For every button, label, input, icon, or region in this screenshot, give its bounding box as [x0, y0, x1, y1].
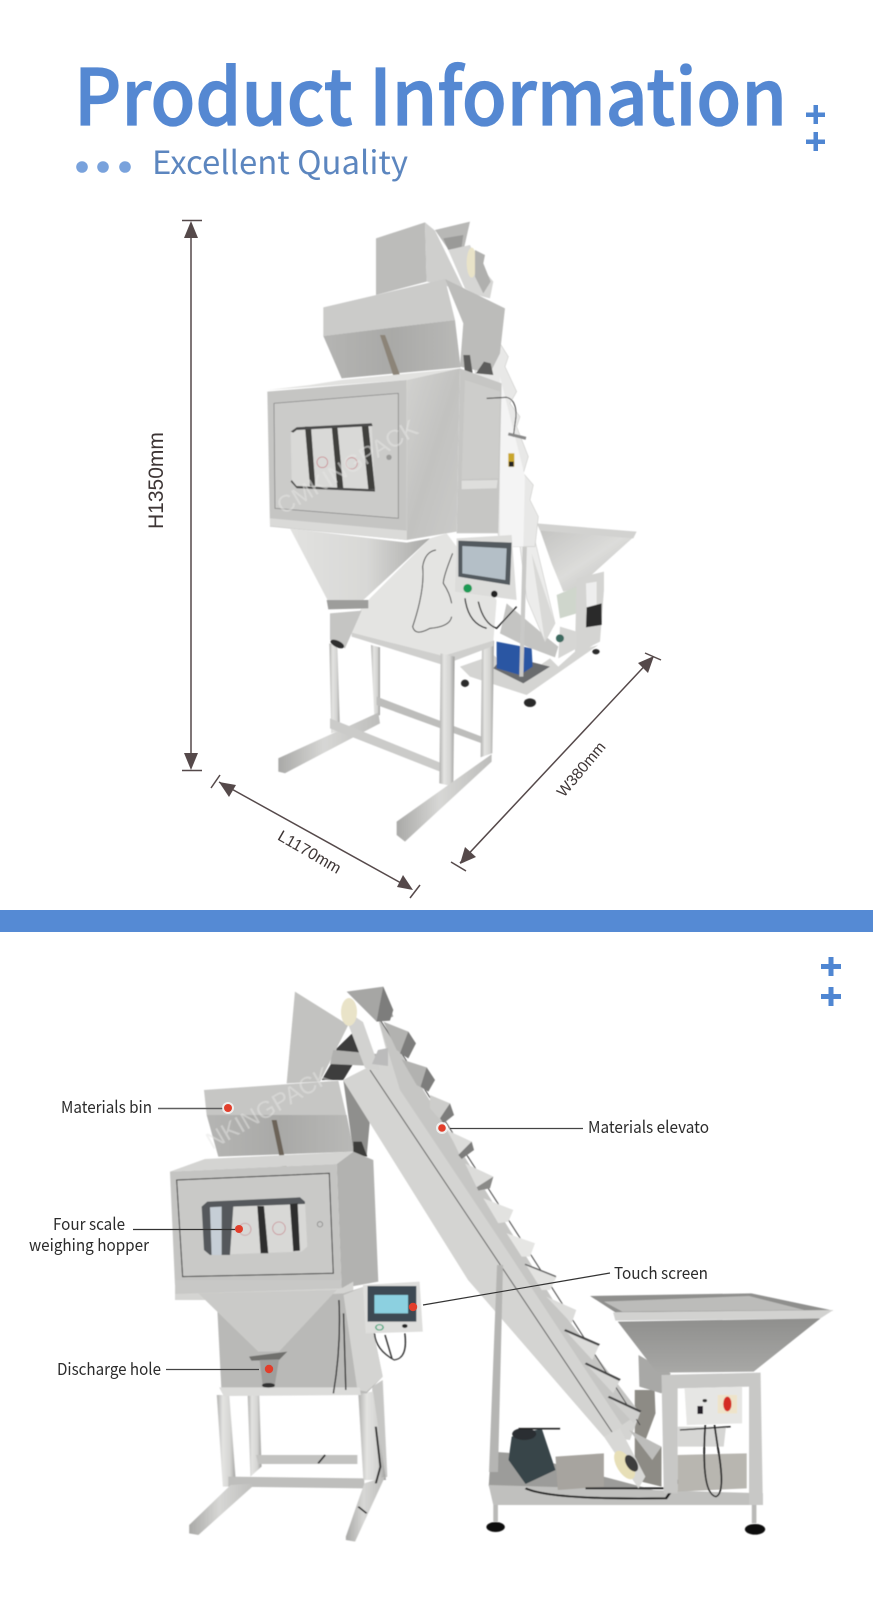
dimension: width — [451, 653, 661, 871]
watermark upper: CMKINGPACK — [272, 415, 423, 520]
blue divider band — [0, 910, 873, 932]
callout: touch screen: Touch screen — [614, 1260, 708, 1284]
legs of weigher — [189, 1380, 387, 1542]
icon: plus signs lower — [821, 957, 841, 1006]
elevator belt — [341, 998, 640, 1472]
dimension: height: H1350mm — [145, 432, 168, 529]
callout: materials elevator — [436, 1114, 709, 1138]
callout: discharge hole: Discharge hole — [57, 1356, 161, 1380]
title: Product Information — [74, 37, 787, 148]
elevator and feeder behind — [460, 520, 637, 707]
dimension: length — [211, 775, 420, 898]
main hopper — [323, 279, 505, 378]
callout: four scale weighing hopper: Four scale — [53, 1211, 125, 1235]
sensor and cable — [487, 397, 526, 467]
callout: materials bin — [61, 1094, 234, 1118]
callout: four scale weighing hopper: weighing hopper — [29, 1232, 150, 1256]
touch panel — [455, 535, 517, 628]
watermark lower: NKINGPACK — [202, 1062, 336, 1155]
callout: materials bin: Materials bin — [61, 1094, 152, 1118]
callout: discharge hole — [57, 1356, 273, 1380]
weigher box with window — [170, 1152, 378, 1300]
callout: materials elevator: Materials elevato — [588, 1114, 709, 1138]
callout: touch screen — [409, 1260, 708, 1311]
feeder base and motor — [486, 1355, 765, 1535]
machine photo: dimensions view — [267, 222, 637, 842]
dimension: height — [145, 220, 202, 770]
machine photo: labelled view — [170, 987, 833, 1542]
back chute — [287, 992, 388, 1157]
callout: four scale weighing hopper — [29, 1211, 243, 1256]
elevator buckets — [347, 987, 435, 1092]
lower body, cone and legs — [278, 528, 497, 842]
dimension: width: W380mm — [554, 739, 610, 801]
cone and panel — [175, 1280, 423, 1396]
lower feed funnel and frame — [590, 1293, 833, 1505]
upper feed bin — [376, 222, 493, 298]
subtitle with dots: Excellent Quality — [152, 138, 408, 184]
icon: plus signs top — [806, 105, 825, 151]
weighing box — [267, 368, 502, 540]
dimension: length: L1170mm — [275, 828, 344, 878]
upper bin — [204, 1081, 367, 1167]
